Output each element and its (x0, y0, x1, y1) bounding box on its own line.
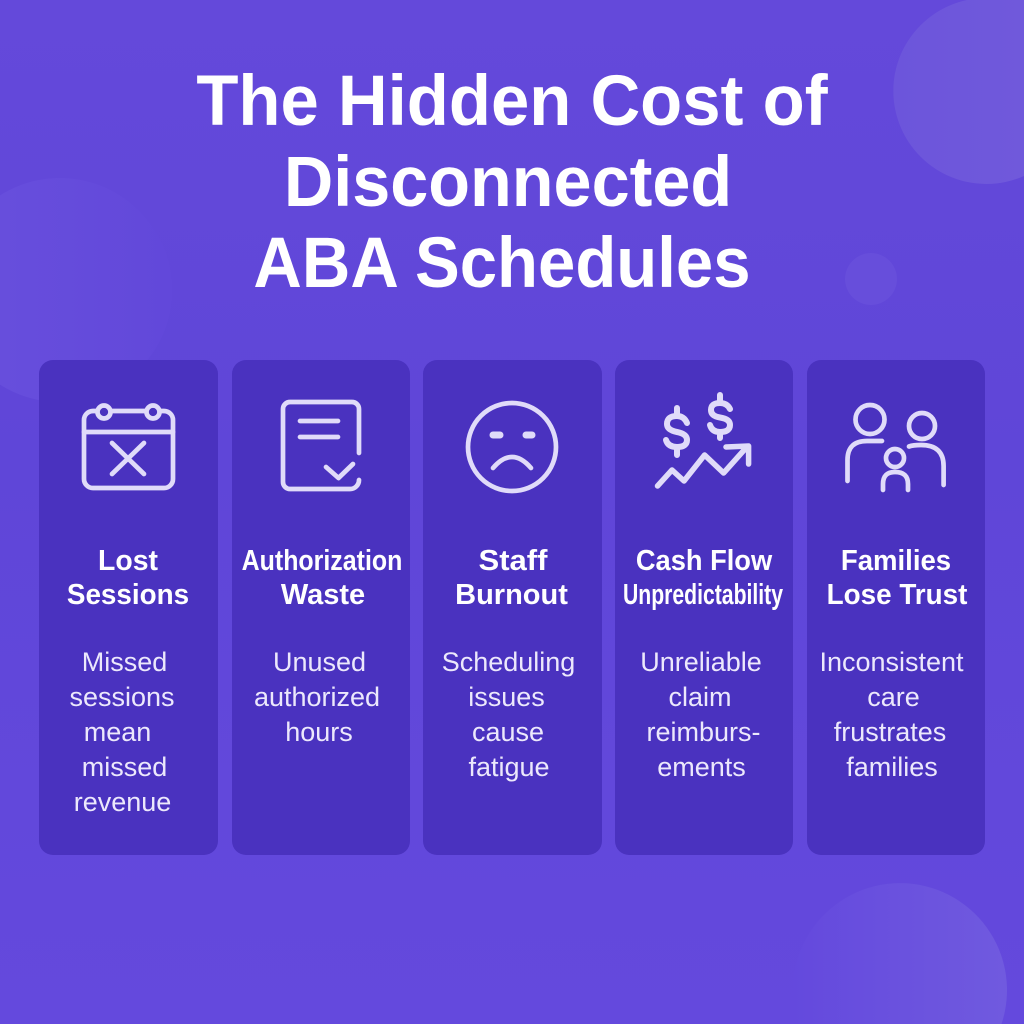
description: hours (285, 717, 353, 747)
description: claim (668, 682, 732, 712)
title: Disconnected (284, 143, 732, 222)
description: Inconsistent (819, 647, 964, 677)
heading: Families (841, 545, 951, 577)
description (69, 647, 175, 817)
description (640, 647, 762, 782)
description: Unreliable (640, 647, 762, 677)
heading (67, 545, 189, 611)
icon: dollars and rising arrow (654, 392, 752, 489)
heading (827, 545, 968, 611)
title (196, 62, 828, 303)
panel: cash flow unpredictability (615, 360, 793, 855)
description: ements (657, 752, 746, 782)
heading: Lost (98, 545, 157, 577)
heading: Waste (281, 579, 365, 611)
description: care (867, 682, 920, 712)
heading (623, 545, 783, 611)
description: fatigue (468, 752, 550, 782)
description: Scheduling (442, 647, 575, 677)
heading: Burnout (455, 579, 568, 611)
description (819, 647, 964, 782)
panel: authorization waste (232, 360, 410, 855)
heading: Unpredictability (623, 579, 783, 611)
icon: family (845, 402, 946, 492)
description: authorized (254, 682, 380, 712)
description: families (846, 752, 938, 782)
description: sessions (69, 682, 175, 712)
heading: Sessions (67, 579, 189, 611)
description: revenue (74, 787, 171, 817)
panel: families lose trust (807, 360, 985, 855)
icon: calendar with x (82, 403, 176, 490)
description: missed (82, 752, 167, 782)
heading (455, 545, 568, 611)
title: The Hidden Cost of (196, 62, 827, 141)
heading: Cash Flow (635, 545, 772, 577)
title: ABA Schedules (253, 224, 751, 303)
description (254, 647, 380, 747)
heading: Staff (478, 545, 547, 577)
description: Unused (273, 647, 366, 677)
description: reimburs- (646, 717, 761, 747)
heading (242, 545, 402, 611)
description: frustrates (834, 717, 946, 747)
description: mean (84, 717, 151, 747)
heading: Authorization (242, 545, 402, 577)
description: Missed (82, 647, 167, 677)
panel: staff burnout (423, 360, 602, 855)
description: cause (472, 717, 544, 747)
icon: document with check (280, 400, 362, 492)
icon: sad face (466, 400, 558, 494)
heading: Lose Trust (827, 579, 967, 611)
description (442, 647, 575, 782)
panel: lost sessions (39, 360, 218, 855)
description: issues (468, 682, 545, 712)
